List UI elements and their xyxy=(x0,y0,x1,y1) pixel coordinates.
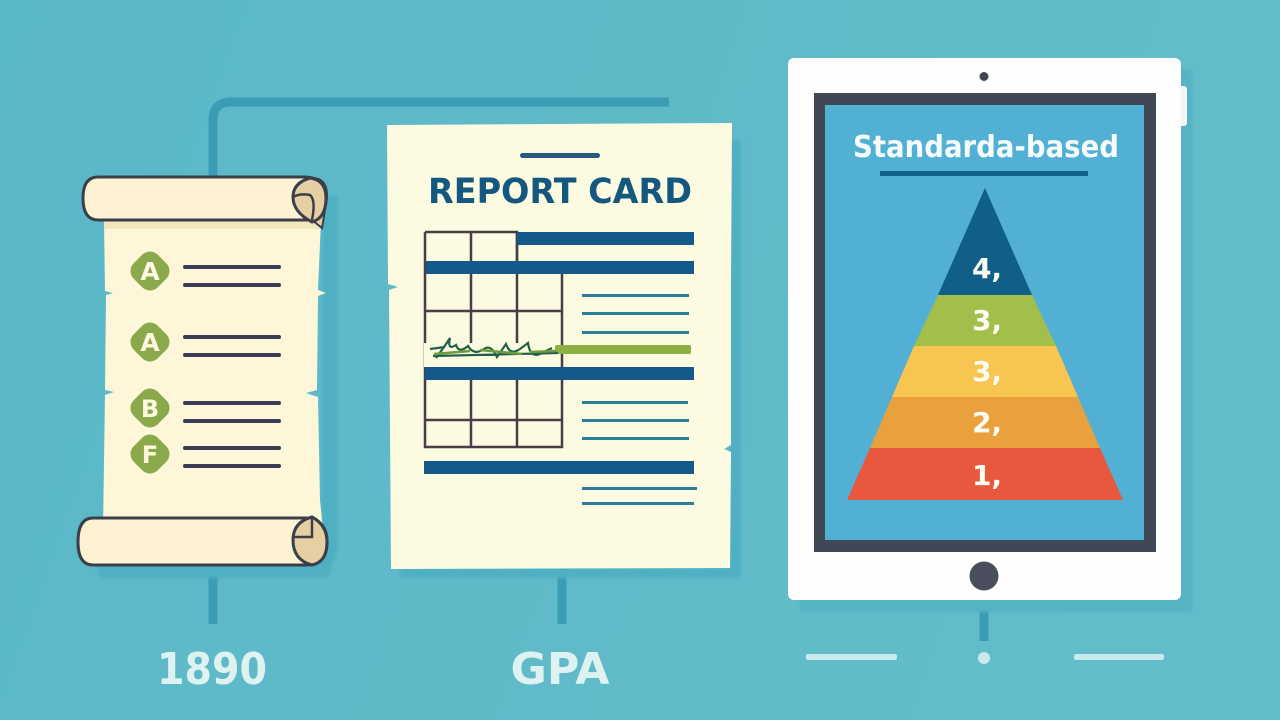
paper xyxy=(387,123,732,569)
timeline connector xyxy=(213,102,984,641)
bottom roller xyxy=(78,517,327,565)
grade row A: A xyxy=(140,328,160,357)
tablet body xyxy=(788,58,1181,600)
report card heading: REPORT CARD xyxy=(428,172,692,212)
grade row A xyxy=(126,247,281,295)
grade table xyxy=(425,232,562,447)
level labels: 1, xyxy=(972,459,1002,492)
screen xyxy=(814,93,1156,552)
text lines xyxy=(582,294,697,505)
signature over green bar xyxy=(424,338,691,367)
label: placeholder dashes xyxy=(806,652,1164,664)
level labels: 3, xyxy=(972,355,1002,388)
tablet shadow xyxy=(800,70,1192,612)
home button xyxy=(970,562,998,590)
panel: 1890 scroll xyxy=(78,177,338,578)
panel: report card xyxy=(387,123,741,578)
level labels: 4, xyxy=(972,252,1002,285)
pyramid xyxy=(847,188,1123,500)
grade row A: A xyxy=(140,257,160,286)
top roller xyxy=(83,177,327,228)
level labels xyxy=(972,252,1002,492)
screen heading: Standarda-based xyxy=(853,130,1119,165)
grade row F xyxy=(126,430,281,478)
paper shadow xyxy=(400,140,741,578)
label: GPA: GPA xyxy=(510,644,610,695)
grade row A xyxy=(126,318,281,366)
label: 1890: 1890 xyxy=(157,644,267,695)
top rule xyxy=(520,153,600,158)
grade row B xyxy=(126,384,281,432)
scroll paper xyxy=(103,220,326,530)
grade row B: B xyxy=(141,395,159,423)
level labels: 3, xyxy=(972,304,1002,337)
panel: tablet xyxy=(788,58,1192,612)
scroll shadow xyxy=(95,195,338,578)
table bars xyxy=(424,232,694,474)
side button xyxy=(1178,86,1187,126)
heading rule xyxy=(880,171,1088,176)
level labels: 2, xyxy=(972,406,1002,439)
grade row F: F xyxy=(142,441,158,469)
camera xyxy=(980,72,988,81)
